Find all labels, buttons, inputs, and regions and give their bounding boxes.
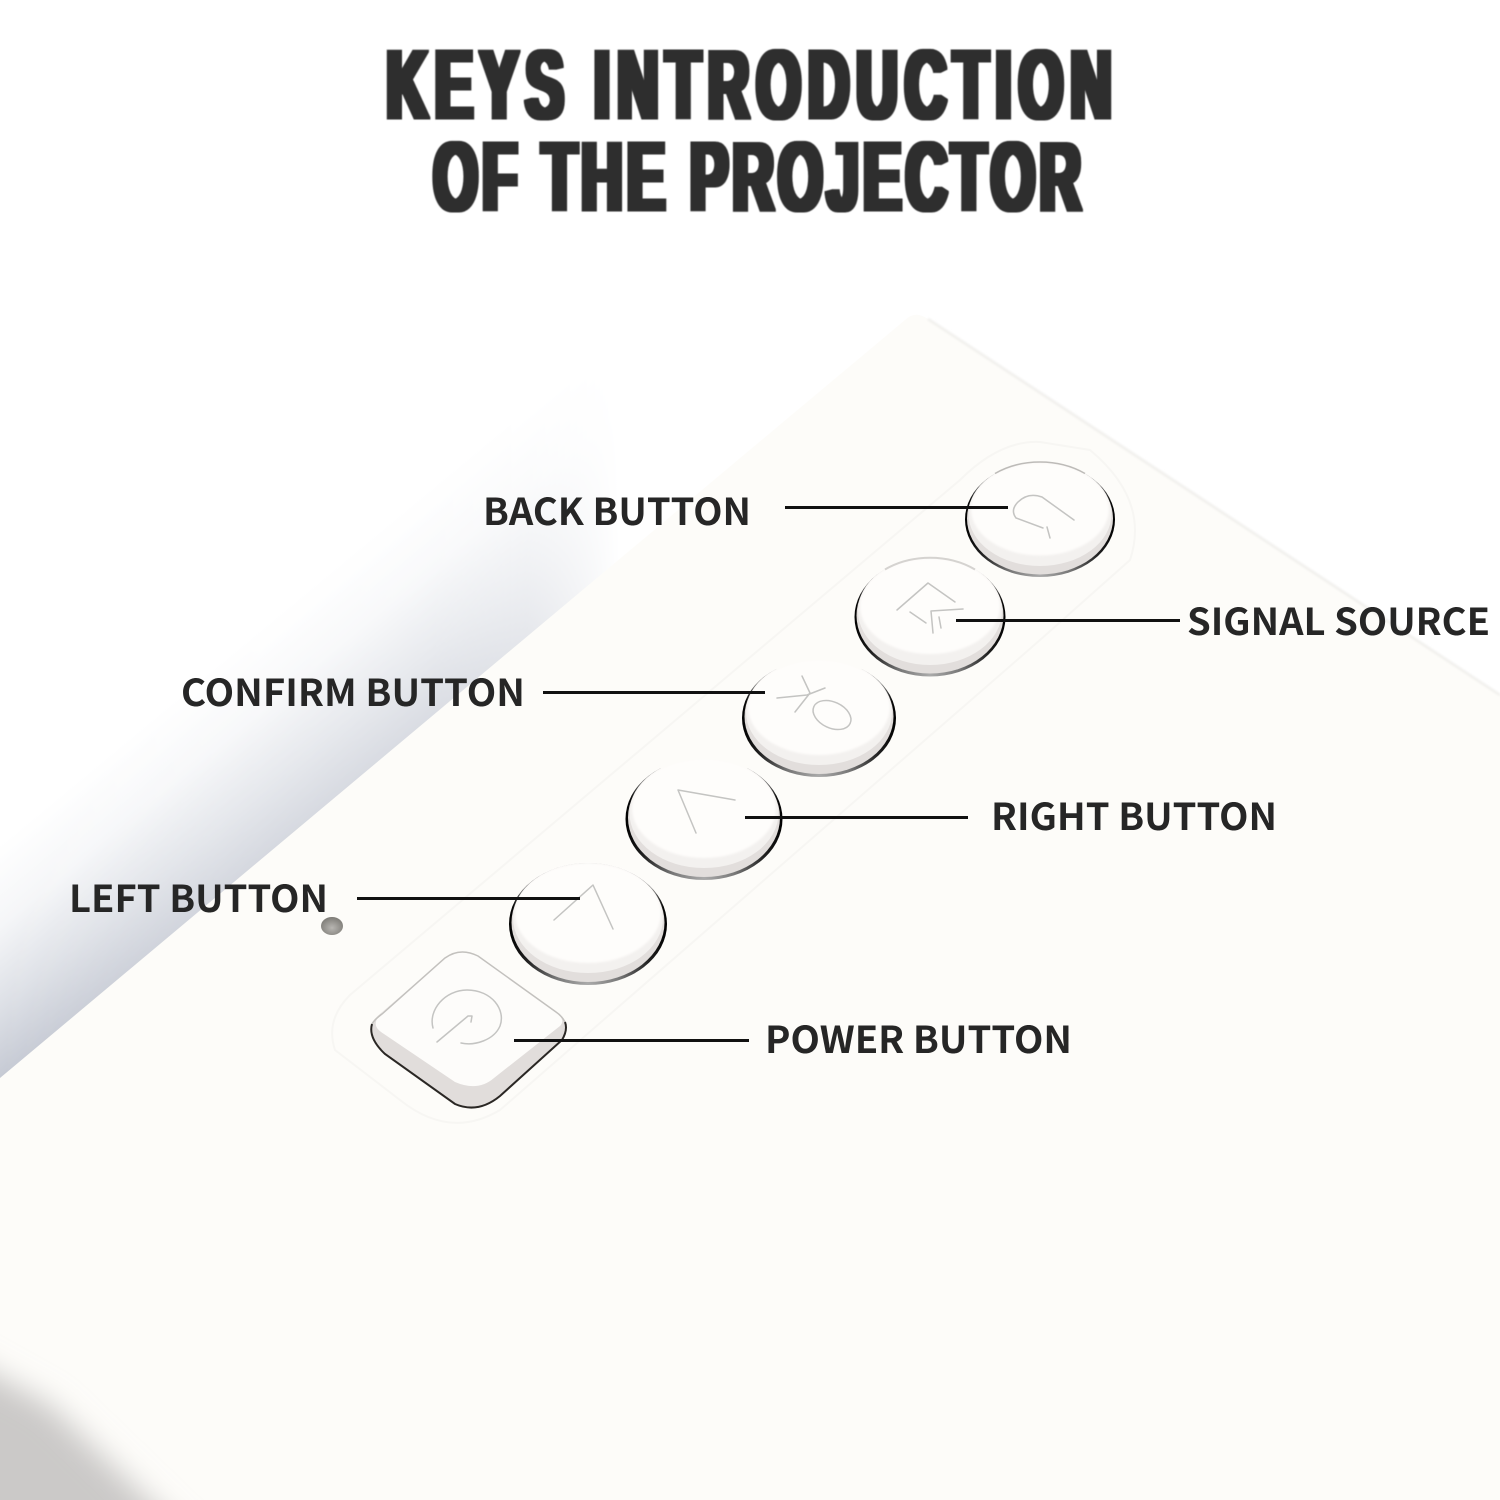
ok button <box>742 658 896 777</box>
signal source button <box>854 557 1006 676</box>
callout: confirm button: CONFIRM BUTTON <box>181 663 525 717</box>
keypad plate outline <box>332 442 1135 1123</box>
icon: OK glyph <box>777 676 856 735</box>
icon: left chevron <box>554 885 613 929</box>
title: KEYS INTRODUCTION <box>387 29 1112 139</box>
title: OF THE PROJECTOR <box>433 121 1081 231</box>
projector body <box>0 315 1500 1500</box>
callout: left button: LEFT BUTTON <box>69 869 328 923</box>
indicator light <box>321 917 343 935</box>
callout: back button: BACK BUTTON <box>483 482 751 536</box>
callout: power button: POWER BUTTON <box>765 1010 1072 1064</box>
left button <box>509 855 667 985</box>
shadow beside projector <box>0 516 589 1078</box>
back button <box>965 462 1115 577</box>
icon: right chevron <box>678 790 735 833</box>
icon: back arrow <box>1013 495 1074 538</box>
callout: right button: RIGHT BUTTON <box>991 787 1277 841</box>
power button <box>371 952 566 1108</box>
icon: signal source <box>897 583 963 633</box>
callout: signal source: SIGNAL SOURCE <box>1187 592 1490 646</box>
right button <box>626 757 782 880</box>
bottom-left corner shading <box>0 1355 190 1500</box>
icon: power symbol <box>432 990 501 1044</box>
title <box>387 29 1112 231</box>
